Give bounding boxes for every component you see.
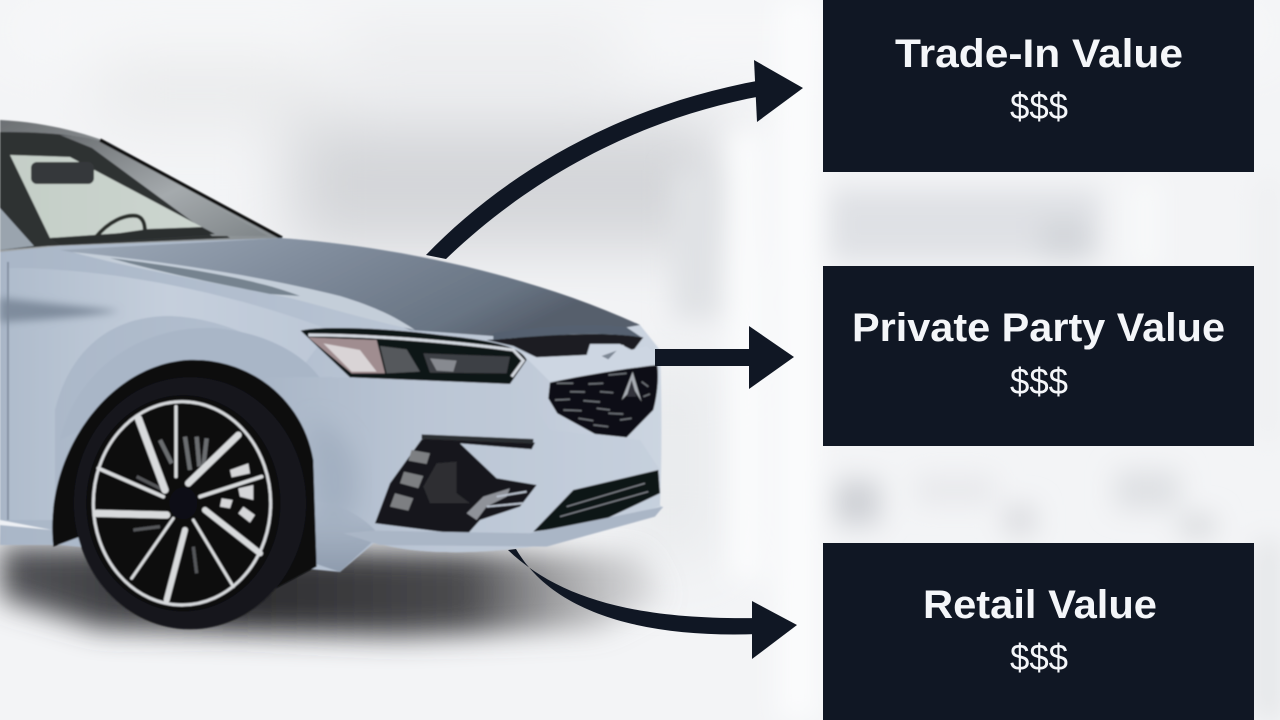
wheel arch rim (60, 328, 320, 440)
car illustration (0, 120, 663, 629)
hood edge and nose trim (487, 334, 643, 357)
panel: private party value (823, 266, 1254, 446)
hood crease highlight (72, 252, 415, 330)
amount: trade-in: $$$ (1010, 86, 1068, 127)
lower bumper (262, 377, 660, 572)
arrow: car to private party value (655, 326, 794, 389)
car ground shadow (0, 545, 665, 636)
car front details (301, 325, 663, 547)
steering wheel (96, 216, 145, 237)
bumper soft shading (310, 420, 358, 520)
lower grille (533, 470, 660, 532)
door seam (7, 262, 9, 520)
upper grille (548, 365, 658, 437)
car body (0, 238, 663, 572)
rim (93, 402, 271, 605)
spokes (97, 407, 262, 600)
heading: trade-in value: Trade-In Value (895, 32, 1183, 76)
amount: private party: $$$ (1010, 361, 1068, 402)
tire (74, 377, 306, 629)
front wheel (52, 360, 317, 629)
fog light housing (375, 437, 537, 535)
hub (169, 487, 197, 519)
headlight (301, 328, 527, 384)
panel: trade-in value (823, 0, 1254, 172)
heading: retail value: Retail Value (923, 583, 1157, 627)
panel: retail value (823, 543, 1254, 720)
arrow: car to trade-in value (426, 60, 803, 259)
rear view mirror (31, 162, 94, 184)
hood (60, 238, 640, 338)
fender panel (8, 268, 330, 520)
heading: private party value: Private Party Value (852, 306, 1225, 350)
front lip (343, 507, 663, 547)
arrow: car to retail value (508, 549, 797, 659)
car roof and windshield (0, 120, 282, 262)
brake details (133, 437, 255, 573)
amount: retail: $$$ (1010, 637, 1068, 678)
wheel arch (52, 360, 317, 620)
